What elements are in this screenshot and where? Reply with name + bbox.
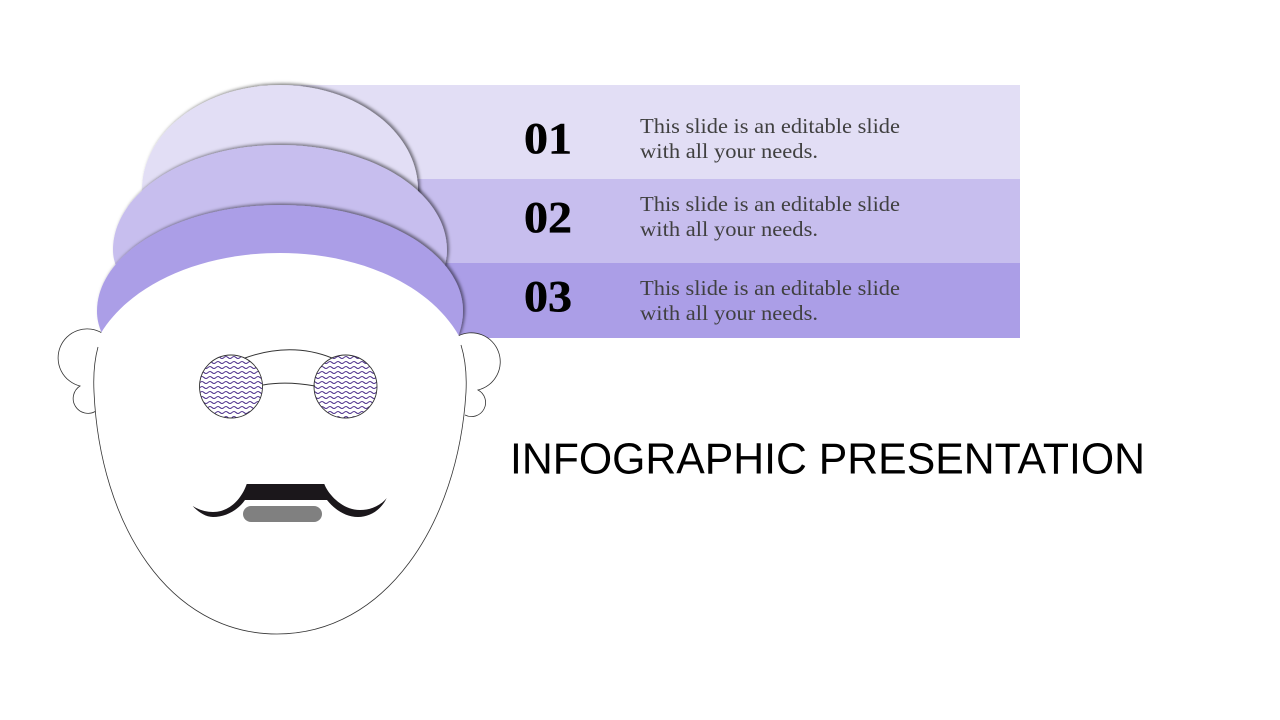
right lens — [314, 355, 377, 418]
item 02 text: This slide is an editable slide — [640, 192, 900, 216]
face outline — [94, 345, 466, 634]
item 01 text: with all your needs. — [640, 139, 818, 163]
band 03 — [280, 263, 1020, 338]
moustache — [193, 484, 387, 517]
item 01 number: 01 — [524, 114, 572, 163]
left lens — [200, 355, 262, 418]
face — [94, 253, 466, 634]
glasses — [200, 350, 377, 418]
item 03 text: with all your needs. — [640, 301, 818, 325]
mouth — [243, 506, 322, 522]
title: INFOGRAPHIC PRESENTATION — [510, 436, 1145, 484]
item 02 number: 02 — [524, 193, 572, 242]
item 03 number: 03 — [524, 272, 572, 321]
item 01 text: This slide is an editable slide — [640, 114, 900, 138]
left ear — [58, 329, 102, 413]
illustration: head with hat — [58, 85, 500, 634]
band 02 — [280, 179, 1020, 263]
panel: numbered bands — [280, 85, 1020, 338]
glasses bridge — [245, 350, 332, 386]
item 02 text: with all your needs. — [640, 217, 818, 241]
hat layer 2 — [113, 145, 447, 266]
right ear — [458, 333, 500, 417]
item 03 text: This slide is an editable slide — [640, 276, 900, 300]
hat layer 1 — [142, 85, 418, 240]
hat layer 3 — [97, 205, 463, 337]
band 01 — [280, 85, 1020, 179]
